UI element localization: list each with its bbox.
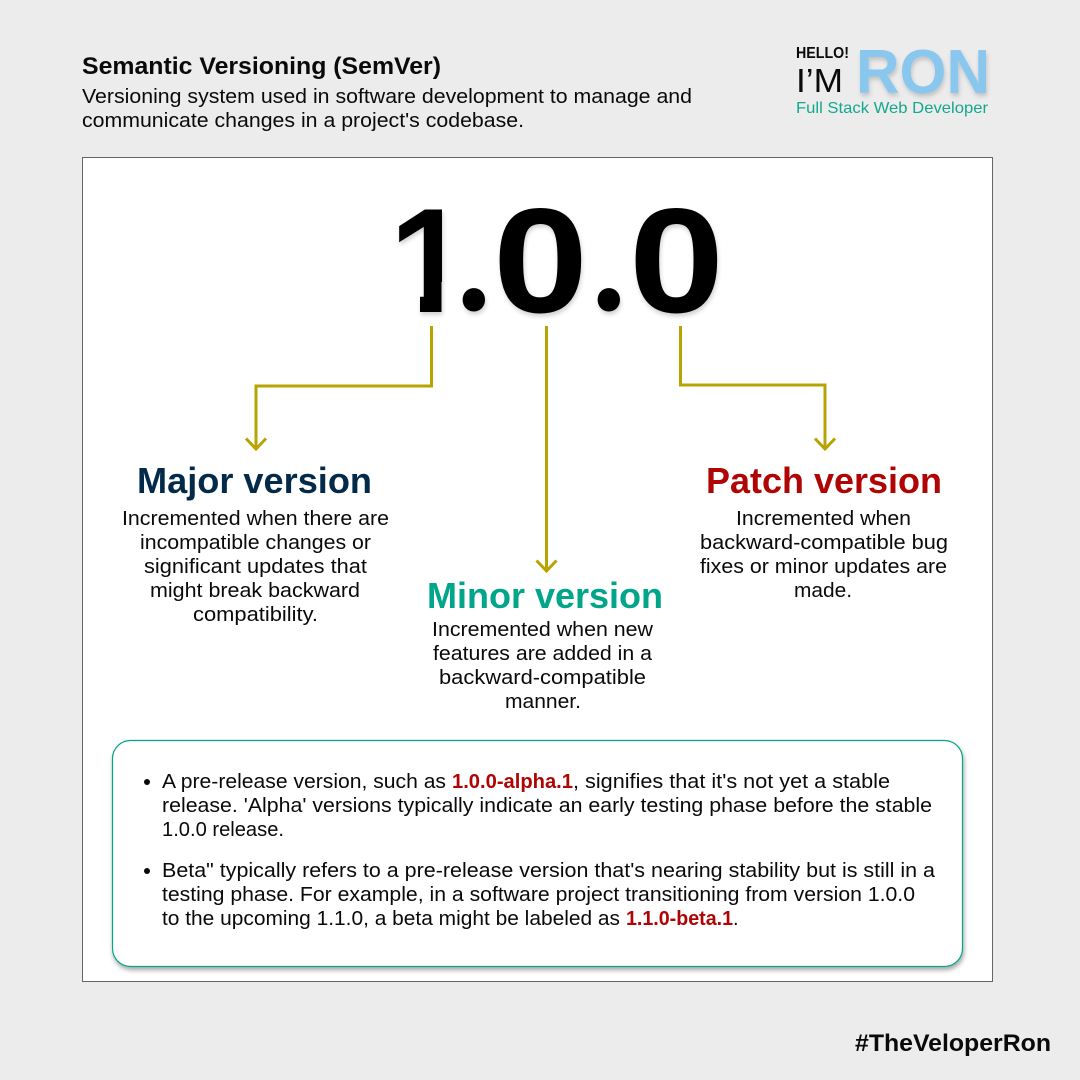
minor version description: features are added in a — [433, 643, 653, 665]
patch version description — [700, 508, 948, 602]
patch version description: fixes or minor updates are — [700, 556, 947, 578]
version number 1.0.0: 0 — [629, 178, 724, 344]
title: Semantic Versioning (SemVer) — [82, 53, 441, 80]
note: beta pre-release: 1.1.0-beta.1 — [626, 908, 733, 930]
logo: Hello I'm Ron — [796, 38, 990, 117]
major version description: compatibility. — [193, 604, 318, 626]
heading: major version: Major version — [137, 460, 372, 501]
logo: Hello I'm Ron: HELLO! — [796, 45, 849, 62]
patch version — [700, 460, 948, 602]
version number 1.0.0: 1 — [389, 177, 472, 344]
major version description — [122, 508, 389, 626]
minor version description: backward-compatible — [439, 667, 646, 689]
patch version description: backward-compatible bug — [700, 532, 948, 554]
note: alpha pre-release — [144, 771, 932, 841]
description: Versioning system used in software development to manage and — [82, 86, 692, 108]
note: beta pre-release — [144, 860, 936, 930]
arrow: to major version — [246, 326, 432, 449]
patch version description: Incremented when — [736, 508, 911, 530]
major version description: Incremented when there are — [122, 508, 389, 530]
logo: Hello I'm Ron: RON — [856, 38, 990, 107]
major version description: incompatible changes or — [140, 532, 371, 554]
major version description: might break backward — [150, 580, 360, 602]
hashtag footer: #TheVeloperRon — [855, 1030, 1051, 1057]
note: beta pre-release: Beta" typically refers to a pre-release version that's nearing stability but is still in a — [162, 860, 936, 882]
minor version description: manner. — [505, 691, 581, 713]
callout box — [112, 740, 962, 966]
major version description: significant updates that — [144, 556, 367, 578]
note: alpha pre-release: , signifies that it's not yet a stable — [573, 771, 890, 793]
heading: patch version: Patch version — [706, 460, 942, 501]
version number 1.0.0: . — [589, 169, 629, 346]
minor version — [427, 575, 663, 713]
heading: minor version: Minor version — [427, 575, 663, 616]
logo: Hello I'm Ron: I’M — [796, 62, 843, 99]
header: title and description — [82, 53, 692, 132]
main panel — [82, 158, 992, 982]
major version — [122, 460, 389, 626]
minor version description — [432, 619, 654, 713]
logo: Hello I'm Ron: Full Stack Web Developer — [796, 100, 989, 117]
arrow: to patch version — [680, 326, 835, 449]
note: alpha pre-release: release. 'Alpha' versions typically indicate an early testing phase before the stable — [162, 795, 932, 817]
note: beta pre-release: to the upcoming 1.1.0, a beta might be labeled as — [162, 908, 620, 930]
version number 1.0.0: 0 — [493, 178, 588, 344]
description: communicate changes in a project's codebase. — [82, 110, 524, 132]
note: beta pre-release: . — [733, 908, 739, 930]
note: alpha pre-release: A pre-release version, such as — [162, 771, 446, 793]
minor version description: Incremented when new — [432, 619, 654, 641]
arrow: to minor version — [536, 326, 556, 571]
note: beta pre-release: testing phase. For example, in a software project transitioning from version 1.0.0 — [162, 884, 915, 906]
description — [82, 86, 692, 132]
version number 1.0.0: . — [454, 169, 494, 346]
patch version description: made. — [794, 580, 852, 602]
note: alpha pre-release: 1.0.0 release. — [162, 819, 284, 841]
version number 1.0.0 — [398, 208, 720, 318]
note: alpha pre-release: 1.0.0-alpha.1 — [452, 771, 573, 793]
